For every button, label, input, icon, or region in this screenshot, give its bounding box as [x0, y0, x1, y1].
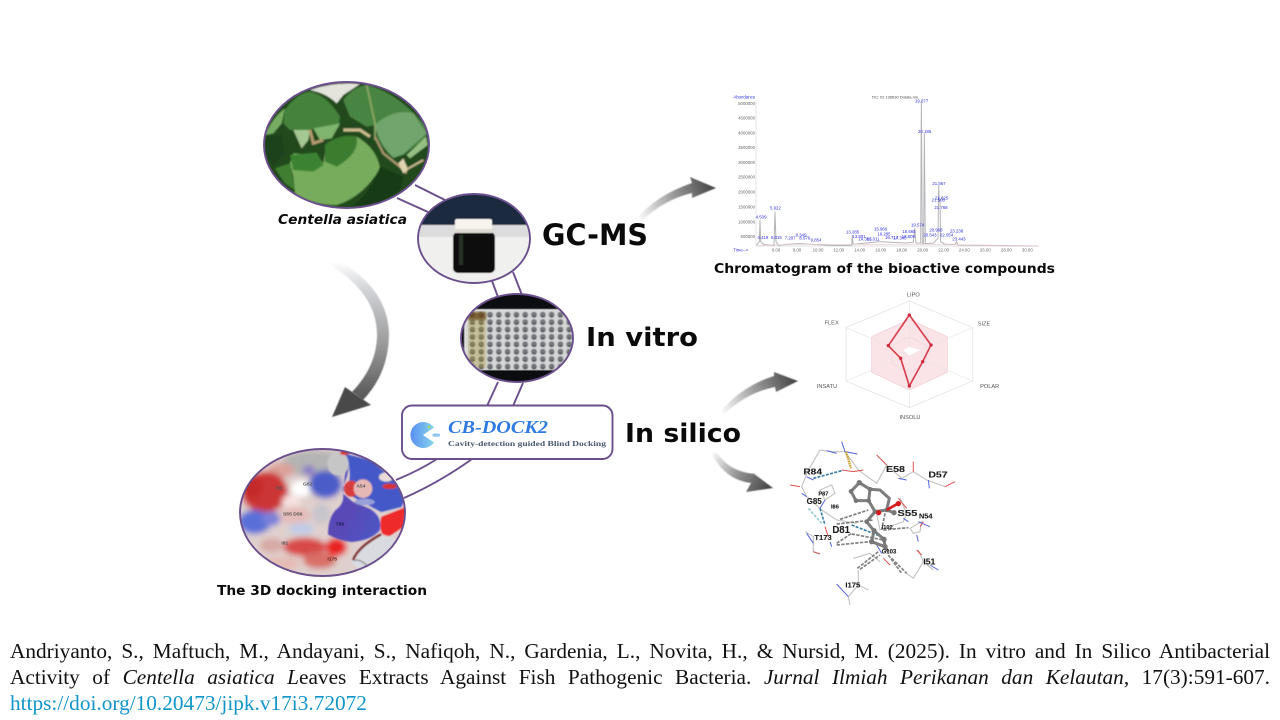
residue labels: N54 — [919, 512, 933, 521]
chart: radar bioavailability: INSATU — [817, 384, 837, 390]
peak labels: 18.809 — [902, 234, 915, 239]
peak labels: 9.854 — [811, 238, 822, 243]
residue labels: I51 — [923, 557, 936, 567]
chart: radar bioavailability: LIPO — [907, 292, 920, 298]
peak labels: 21.508 — [932, 198, 945, 203]
peak labels: 21.825 — [935, 196, 949, 201]
arrow: to docking interactions — [711, 453, 773, 492]
arrow: to radar — [720, 372, 798, 414]
caption: 3D docking: The 3D docking interaction — [217, 584, 427, 599]
x axis labels: 14.00 — [854, 247, 866, 252]
chart: radar bioavailability: POLAR — [980, 384, 999, 390]
peak labels: 8.676 — [799, 235, 811, 240]
peak labels: 13.801 — [852, 234, 866, 239]
peak labels: 4.419 — [757, 235, 769, 240]
y axis labels: 1500000 — [738, 204, 756, 209]
residue labels: D57 — [928, 469, 948, 479]
residue labels: I86 — [831, 505, 839, 511]
photo: dark extract jar — [415, 192, 535, 287]
peak trace — [757, 102, 1038, 246]
residue labels: S55 — [897, 508, 918, 518]
image: 3D docking surface: I175 — [327, 556, 337, 562]
y axis labels: 1000000 — [738, 219, 756, 224]
y axis labels: 2500000 — [738, 175, 756, 180]
curved arrow: Centella to docking — [327, 260, 389, 417]
chart: GC-MS chromatogram: TIC: ID 130630 D\data.ms — [872, 94, 918, 99]
residue labels: I102 — [882, 525, 893, 531]
chart: radar bioavailability: FLEX — [825, 321, 839, 327]
x axis labels: 6.00 — [772, 247, 781, 252]
logo name: CB-DOCK2 — [448, 417, 548, 437]
photo: Centella asiatica leaves — [260, 80, 430, 210]
peak labels: 22.054 — [940, 233, 954, 238]
residue labels: G103 — [882, 549, 897, 555]
peak labels: 6.015 — [771, 235, 782, 240]
peak labels — [733, 95, 966, 252]
x axis labels: 18.00 — [896, 247, 908, 252]
peak labels: 4.509 — [756, 214, 767, 219]
CB-Dock2 logo box — [402, 406, 612, 459]
peak labels: 23.238 — [950, 228, 964, 233]
peak labels: Abundance — [733, 95, 756, 100]
peak labels: 8.349 — [796, 232, 807, 237]
peak labels: 16.285 — [877, 231, 891, 236]
citation text: Andriyanto, S., Maftuch, M., Andayani, S., Nafiqoh, N., Gardenia, L., Novita, H., & Nursid, M. (2025). In vitro and In Silico Antibacterial — [10, 639, 1270, 663]
peak labels: 7.287 — [785, 235, 796, 240]
peak labels: 20.186 — [918, 129, 932, 134]
peak labels: 20.543 — [923, 233, 937, 238]
peak labels: 14.302 — [858, 236, 872, 241]
peak labels: 20.968 — [929, 228, 943, 233]
photo: microplate — [461, 294, 574, 382]
image: 3D docking surface: S55 D56 — [283, 512, 303, 518]
x axis labels: 22.00 — [938, 247, 950, 252]
x axis labels: 24.00 — [959, 247, 970, 252]
x axis labels: 26.00 — [980, 247, 991, 252]
peak labels: 17.340 — [893, 236, 907, 241]
x axis labels: 10.00 — [813, 247, 824, 252]
x axis labels: 28.00 — [1001, 247, 1012, 252]
x axis labels: 30.00 — [1022, 247, 1033, 252]
peak labels: 23.443 — [952, 236, 966, 241]
hydrogen bonds — [808, 471, 882, 537]
ligand — [851, 483, 894, 552]
y axis labels: 5000000 — [738, 101, 756, 106]
peak labels: 19.574 — [911, 223, 925, 228]
chart: GC-MS chromatogram — [733, 94, 1038, 252]
y axis labels: 4000000 — [738, 130, 756, 135]
x axis labels: 20.00 — [917, 247, 929, 252]
residue labels: R84 — [803, 467, 822, 477]
caption: Centella asiatica: Centella asiatica — [278, 213, 407, 228]
x axis labels: 16.00 — [875, 247, 887, 252]
image: 3D docking surface — [236, 445, 410, 579]
y axis labels: 500000 — [741, 234, 756, 239]
residue sticks — [802, 450, 945, 605]
residue labels: P87 — [818, 492, 828, 498]
y axis labels: 4500000 — [738, 116, 756, 121]
residue labels: T173 — [814, 533, 832, 542]
peak labels: 21.567 — [932, 181, 946, 186]
residue labels: D81 — [832, 525, 851, 536]
yellow salt bridge — [846, 452, 851, 468]
residue labels: G85 — [807, 497, 822, 506]
connector lines — [396, 185, 523, 498]
citation text: Activity of Centella asiatica Leaves Extracts Against Fish Pathogenic Bacteria. Jurnal Ilmiah Perikanan dan Kelautan, 17(3):591-607. — [10, 665, 1270, 689]
residue labels — [803, 464, 948, 590]
chart: radar bioavailability: INSOLU — [899, 415, 921, 421]
logo tagline: Cavity-detection guided Blind Docking — [448, 439, 606, 448]
chart: radar bioavailability — [817, 292, 999, 421]
graphical abstract diagram — [217, 81, 1054, 605]
caption: chromatogram: Chromatogram of the bioactive compounds — [714, 262, 1055, 277]
chart: radar bioavailability: SIZE — [978, 322, 991, 328]
peak labels: 15.011 — [867, 236, 880, 241]
residue labels: I175 — [845, 581, 861, 590]
peak labels: 15.966 — [874, 227, 888, 232]
x axis labels — [772, 247, 1033, 252]
peak labels: 5.922 — [770, 206, 781, 211]
peak labels: 18.665 — [902, 229, 916, 234]
x axis labels: 12.00 — [833, 247, 845, 252]
y axis labels: 3500000 — [738, 145, 756, 150]
image: 3D docking surface: I81 — [281, 541, 288, 547]
image: 3D docking surface: A54 — [356, 484, 366, 490]
peak labels: 13.285 — [846, 229, 860, 234]
peak labels: 16.714 — [885, 235, 899, 240]
peak labels: Time--> — [733, 247, 749, 252]
y axis labels: 3000000 — [738, 160, 756, 165]
diagram: 2D ligand interactions — [790, 442, 955, 605]
peak labels: 21.768 — [934, 205, 948, 210]
x axis labels: 8.00 — [793, 247, 802, 252]
arrow: to chromatogram — [637, 177, 716, 221]
y axis labels — [738, 101, 756, 239]
image: 3D docking surface: I50 — [275, 486, 282, 492]
citation text: https://doi.org/10.20473/jipk.v17i3.72072 — [10, 691, 367, 715]
peak labels: 19.877 — [915, 98, 929, 103]
label: In silico: In silico — [625, 419, 741, 449]
polar atoms — [790, 455, 955, 565]
citation text — [10, 639, 1270, 715]
icon: pacman logo — [410, 422, 440, 448]
image: 3D docking surface: G51 — [303, 482, 313, 488]
label: In vitro: In vitro — [586, 323, 698, 353]
residue labels: E58 — [886, 464, 905, 474]
y axis labels: 2000000 — [738, 190, 756, 195]
label: GC-MS: GC-MS — [542, 218, 648, 252]
hydrophobic contacts — [837, 510, 908, 573]
image: 3D docking surface: T80 — [336, 522, 344, 528]
